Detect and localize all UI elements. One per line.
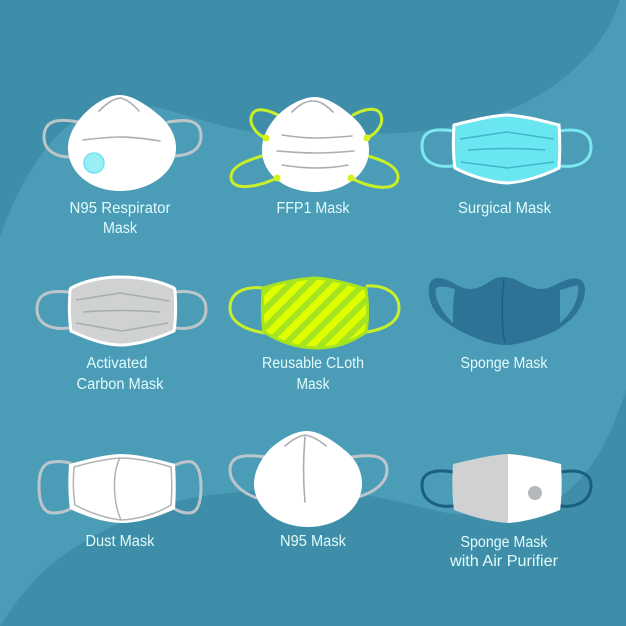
label: FFP1 Mask: FFP1 Mask: [276, 200, 350, 217]
label: N95 Respirator Mask: [70, 200, 170, 237]
mask: dust: [39, 454, 201, 523]
label: Reusable CLoth Mask: Mask: [296, 376, 330, 393]
label: Reusable CLoth Mask: [262, 355, 364, 393]
mask: N95 respirator: [44, 95, 201, 191]
mask: N95: [230, 431, 387, 527]
label: Activated Carbon Mask: Activated: [86, 355, 148, 372]
label: Activated Carbon Mask: [76, 355, 164, 393]
label: N95 Respirator Mask: N95 Respirator: [70, 200, 170, 217]
label: Sponge Mask with Air Purifier: [449, 534, 558, 570]
label: Reusable CLoth Mask: Reusable CLoth: [262, 355, 364, 372]
label: Surgical Mask: Surgical Mask: [458, 200, 551, 217]
mask: surgical: [422, 115, 591, 183]
label: N95 Respirator Mask: Mask: [103, 220, 137, 237]
label: Dust Mask: Dust Mask: [86, 533, 155, 550]
label: Activated Carbon Mask: Carbon Mask: [76, 376, 164, 393]
mask: FFP1: [231, 97, 398, 192]
label: N95 Mask: N95 Mask: [280, 533, 346, 550]
mask: activated carbon: [37, 277, 206, 345]
label: Sponge Mask: Sponge Mask: [460, 355, 548, 372]
label: Sponge Mask with Air Purifier: Sponge Mask: [460, 534, 548, 551]
mask: reusable cloth: [230, 278, 399, 348]
mask: sponge with air purifier: [422, 454, 591, 523]
label: Sponge Mask with Air Purifier: with Air Purifier: [449, 553, 558, 570]
mask: sponge: [429, 277, 585, 345]
